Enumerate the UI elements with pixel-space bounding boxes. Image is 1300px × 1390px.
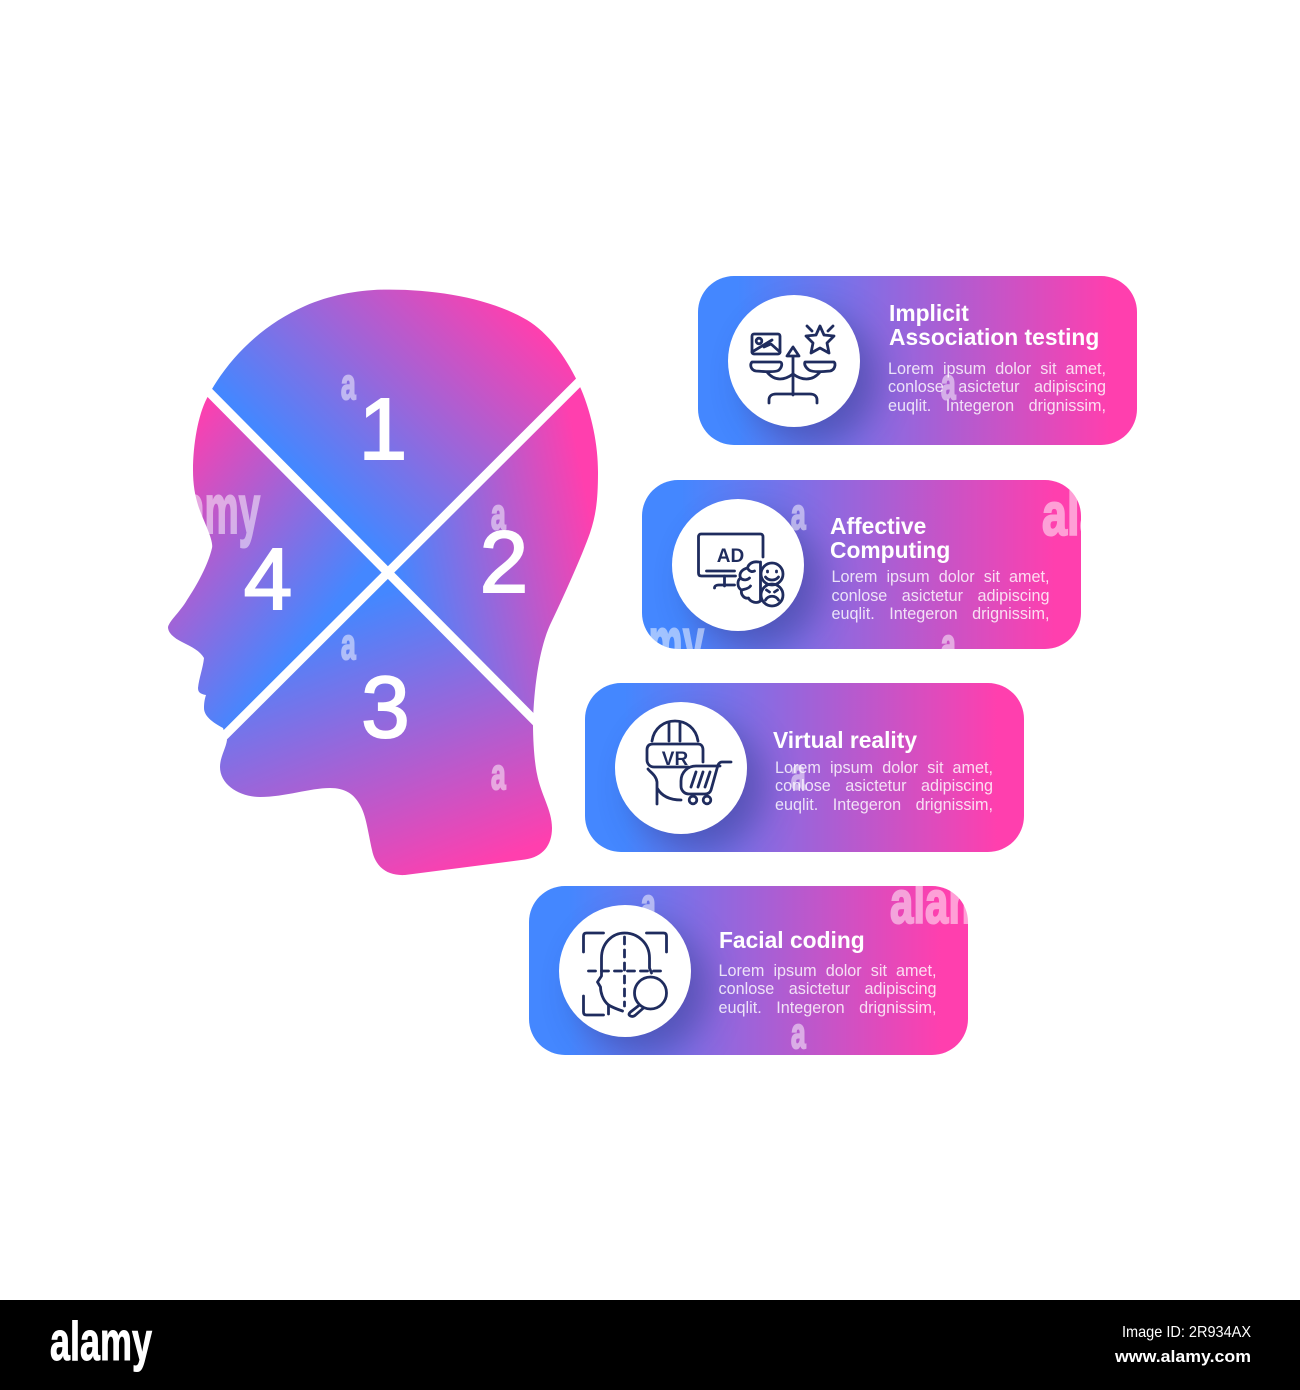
card 1: Implicit Association testing [698,276,1137,445]
numbers on the head: 4 [244,531,292,628]
icon: VR headset with shopping cart: VR [662,749,688,770]
watermark overlay: a [791,489,806,539]
watermark overlay: a [941,359,956,409]
watermark overlay: a [341,619,356,669]
icon: AD monitor with brain and emotion faces: AD [716,546,744,567]
body text: Lorem ipsum dolor sit amet, [888,360,1106,378]
card 3: Virtual reality [585,683,1024,852]
watermark overlay: alamy [890,869,1009,936]
watermark overlay: a [491,489,506,539]
quadrant 4 [168,397,382,730]
body text: Lorem ipsum dolor sit amet, [718,962,936,980]
card 4: Facial coding [529,886,968,1055]
watermark overlay: a [641,879,656,929]
card 2: Affective Computing [642,480,1081,649]
heading: Facial coding [719,927,865,953]
alamy logo: alamy [50,1310,152,1372]
white cross dividers [198,371,590,746]
watermark overlay: alamy [1042,482,1170,549]
body text: conlose asictetur adipiscing [832,587,1050,605]
quadrant 1 [212,290,576,566]
heading: Affective [830,513,926,539]
body text: Lorem ipsum dolor sit amet, [832,568,1050,586]
watermark overlay: a [791,1008,806,1058]
quadrant 2 [394,387,598,713]
numbers on the head: 3 [361,659,410,756]
icon: balance scale with picture and star [728,295,860,427]
body text: euqlit. Integeron drignissim, [832,605,1050,623]
heading: Virtual reality [773,727,917,753]
body text [832,568,1050,623]
quadrant 3 [220,579,552,876]
heading [889,300,1099,350]
icon: face scan with magnifier [558,905,690,1037]
heading: Computing [830,537,950,563]
body text: euqlit. Integeron drignissim, [718,999,936,1017]
heading [830,513,950,563]
heading: Association testing [889,324,1099,350]
watermark overlay: a [341,359,356,409]
body text: conlose asictetur adipiscing [718,980,936,998]
watermark overlay: alamy [151,470,261,548]
body text: euqlit. Integeron drignissim, [888,397,1106,415]
body text: conlose asictetur adipiscing [775,777,993,795]
watermark overlay: alamy [595,603,705,681]
body text [775,759,993,814]
icon: VR headset with shopping cart [615,702,747,834]
numbers on the head: 2 [480,514,528,611]
icon: AD monitor with brain and emotion faces [672,499,804,631]
image id: Image ID: 2R934AX [1122,1324,1251,1341]
body text: euqlit. Integeron drignissim, [775,796,993,814]
watermark overlay: a [941,619,956,669]
website address: www.alamy.com [1114,1347,1251,1366]
numbers on the head: 1 [359,381,407,478]
body text [718,962,936,1017]
body text: Lorem ipsum dolor sit amet, [775,759,993,777]
heading: Implicit [889,300,969,326]
body text: conlose asictetur adipiscing [888,378,1106,396]
watermark overlay: a [791,749,806,799]
body text [888,360,1106,415]
black footer bar with alamy branding [0,1300,1300,1390]
watermark overlay: a [491,749,506,799]
numbers on the head [244,381,528,756]
head silhouette with four quadrants [168,290,598,876]
